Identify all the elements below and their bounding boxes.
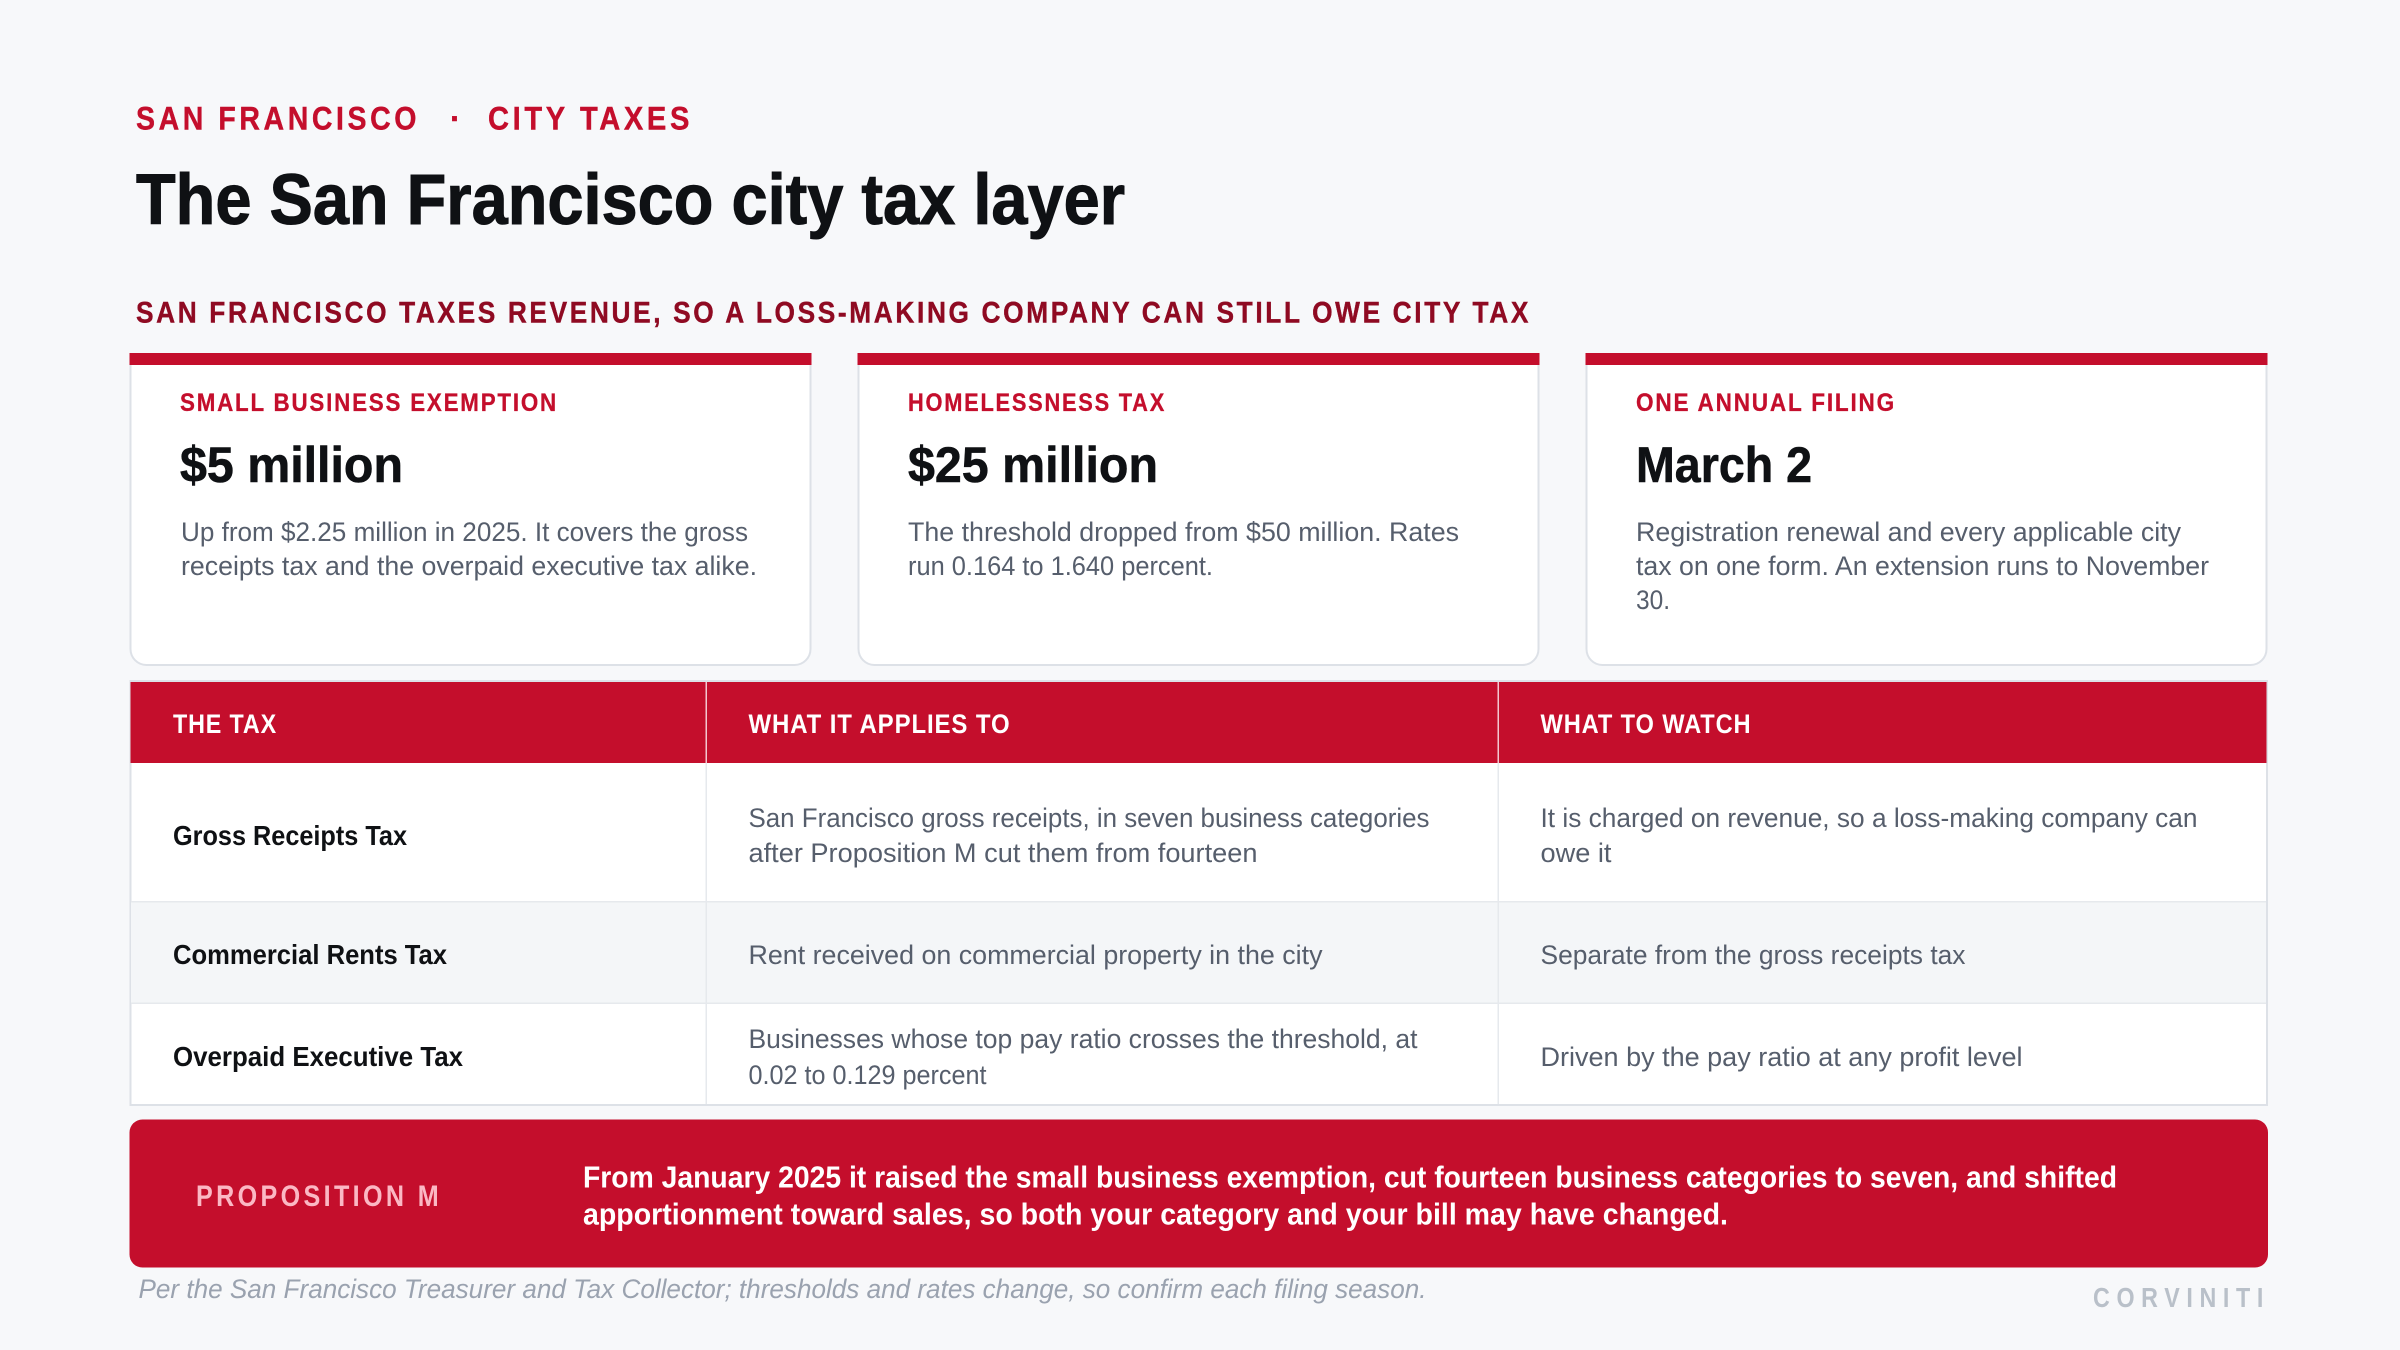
card body: receipts tax and the overpaid executive tax alike. (181, 551, 757, 581)
row: gross receipts tax (173, 803, 2198, 868)
row: overpaid executive tax (173, 1024, 2022, 1090)
card label: SMALL BUSINESS EXEMPTION (180, 389, 558, 417)
row: commercial rents tax (173, 939, 1966, 970)
eyebrow: CITY TAXES (488, 100, 693, 136)
callout label: PROPOSITION M (196, 1180, 442, 1213)
tax table (130, 681, 2267, 1105)
row: gross receipts tax: owe it (1540, 838, 1612, 868)
callout text: From January 2025 it raised the small business exemption, cut fourteen business categories to seven, and shifted (583, 1160, 2117, 1194)
row: overpaid executive tax: Overpaid Executive Tax (173, 1041, 463, 1072)
card body: run 0.164 to 1.640 percent. (908, 551, 1213, 581)
eyebrow: SAN FRANCISCO (136, 100, 420, 136)
card body: The threshold dropped from $50 million. Rates (908, 517, 1459, 547)
card label: HOMELESSNESS TAX (908, 389, 1166, 417)
card body: Registration renewal and every applicable city (1636, 517, 2181, 547)
card body: 30. (1636, 585, 1670, 615)
row: gross receipts tax: after Proposition M cut them from fourteen (748, 838, 1258, 868)
subheading: SAN FRANCISCO TAXES REVENUE, SO A LOSS-MAKING COMPANY CAN STILL OWE CITY TAX (136, 296, 1531, 330)
table header: WHAT TO WATCH (1540, 709, 1752, 739)
eyebrow: · (450, 100, 465, 136)
card value: March 2 (1636, 437, 1812, 493)
row: overpaid executive tax: Businesses whose top pay ratio crosses the threshold, at (748, 1024, 1418, 1054)
card value: $5 million (180, 437, 403, 493)
eyebrow (136, 100, 693, 136)
panel: homelessness tax (858, 353, 1540, 665)
footnote: Per the San Francisco Treasurer and Tax Collector; thresholds and rates change, so confirm each filing season. (138, 1274, 1426, 1304)
wordmark: CORVINITI (2093, 1282, 2270, 1313)
card body: tax on one form. An extension runs to November (1636, 551, 2209, 581)
card body (908, 517, 1459, 581)
panel: one annual filing (1586, 353, 2268, 665)
row: commercial rents tax: Separate from the gross receipts tax (1540, 940, 1966, 970)
callout text: apportionment toward sales, so both your category and your bill may have changed. (583, 1196, 1728, 1232)
table header (130, 682, 2266, 763)
row: overpaid executive tax: 0.02 to 0.129 percent (748, 1060, 987, 1090)
row: commercial rents tax: Commercial Rents Tax (173, 939, 447, 970)
row: gross receipts tax: Gross Receipts Tax (173, 820, 407, 851)
table header: THE TAX (173, 709, 277, 739)
table header: WHAT IT APPLIES TO (748, 709, 1010, 739)
card body (1636, 517, 2209, 615)
card body: Up from $2.25 million in 2025. It covers the gross (181, 517, 748, 547)
row: gross receipts tax: It is charged on revenue, so a loss-making company can (1540, 803, 2198, 833)
card value: $25 million (908, 437, 1158, 493)
row: commercial rents tax: Rent received on commercial property in the city (748, 940, 1323, 970)
panel: small business exemption (130, 353, 812, 665)
card body (181, 517, 757, 581)
callout text (583, 1160, 2117, 1232)
card label: ONE ANNUAL FILING (1636, 389, 1896, 417)
callout: proposition m (130, 1120, 2268, 1268)
title: The San Francisco city tax layer (136, 161, 1125, 240)
row: gross receipts tax: San Francisco gross receipts, in seven business categories (748, 803, 1430, 833)
row: overpaid executive tax: Driven by the pay ratio at any profit level (1540, 1042, 2022, 1072)
